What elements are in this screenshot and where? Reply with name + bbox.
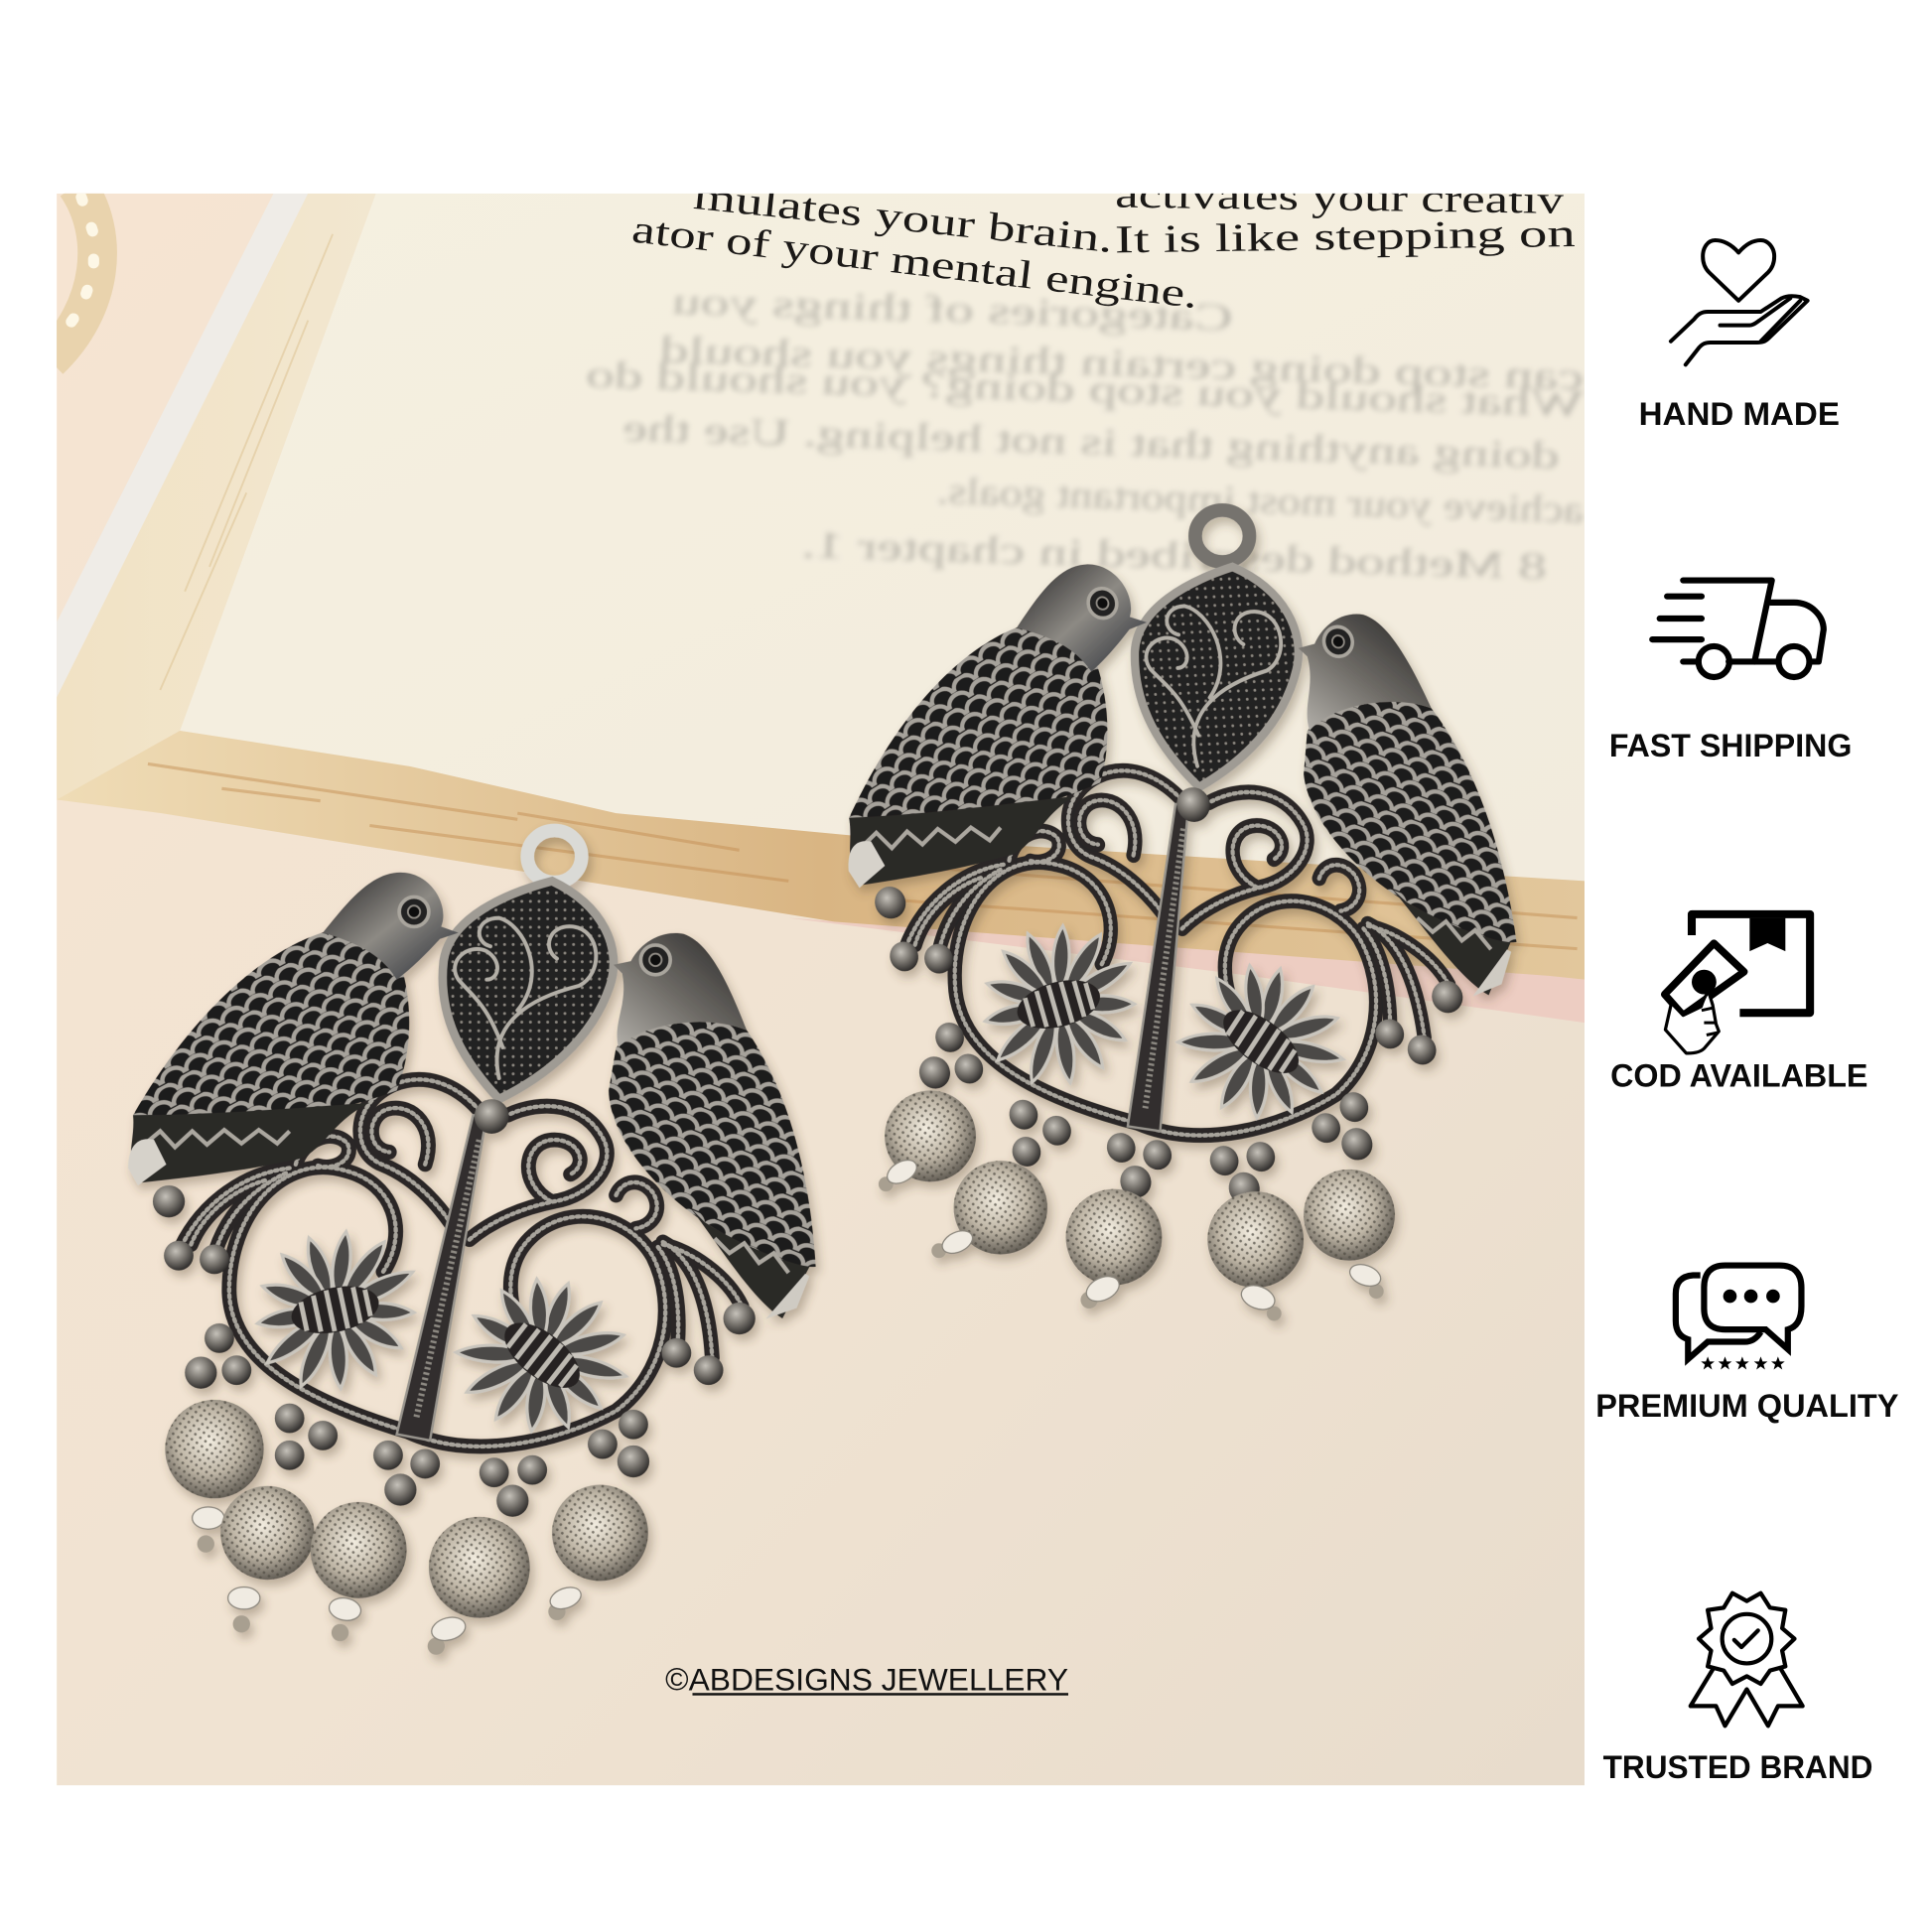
watermark: ©ABDESIGNS JEWELLERY <box>665 1663 1068 1698</box>
label: fast shipping: FAST SHIPPING <box>1609 728 1852 763</box>
earring: right <box>825 510 1537 1320</box>
book printed text: activates your creativ <box>1115 173 1565 222</box>
hanging loop <box>1195 510 1249 562</box>
label: cod available: COD AVAILABLE <box>1610 1058 1867 1094</box>
show-through text on page: achieve your most important goals. <box>936 471 1585 531</box>
dangling balls <box>879 1090 1395 1320</box>
book printed text: mulates your brain. <box>692 174 1115 261</box>
icon: review chat bubbles <box>1676 1266 1801 1369</box>
label: premium quality: PREMIUM QUALITY <box>1595 1388 1898 1424</box>
dangling balls <box>165 1400 648 1655</box>
book printed text: It is like stepping on t <box>1115 210 1605 261</box>
book printed text: ator of your mental engine. <box>629 207 1200 317</box>
show-through text on page: can stop doing certain things you should <box>659 330 1585 398</box>
icon: heart in hand <box>1671 240 1808 364</box>
book bottom wood edge <box>57 731 1585 980</box>
icon: rosette badge <box>1691 1593 1803 1725</box>
show-through text on page: 8 Method described in chapter 1. <box>801 524 1548 588</box>
icon: cash on delivery <box>1665 914 1810 1053</box>
show-through text on page: doing anything that is not helping. Use the <box>622 408 1560 478</box>
icon: delivery truck <box>1652 581 1824 677</box>
book <box>57 173 1605 1023</box>
show-through text on page <box>586 281 1585 588</box>
show-through text on page: Categories of things you <box>671 281 1233 340</box>
show-through text on page: What should you stop doing? you should do <box>586 354 1585 425</box>
earring frame with birds <box>128 873 816 1517</box>
book red edge <box>788 918 1585 1023</box>
book white edge <box>57 194 308 697</box>
earring: left <box>128 830 816 1655</box>
label: hand made: HAND MADE <box>1639 396 1840 432</box>
book printed text <box>633 193 1575 308</box>
pearl necklace <box>50 185 97 359</box>
label: trusted brand: TRUSTED BRAND <box>1603 1749 1872 1785</box>
book page <box>180 194 1585 881</box>
panel: product photo <box>50 173 1605 1785</box>
table surface <box>57 194 1585 1785</box>
book left wood edge <box>57 255 278 800</box>
hanging loop <box>527 830 582 883</box>
earring frame with birds <box>825 548 1537 1219</box>
